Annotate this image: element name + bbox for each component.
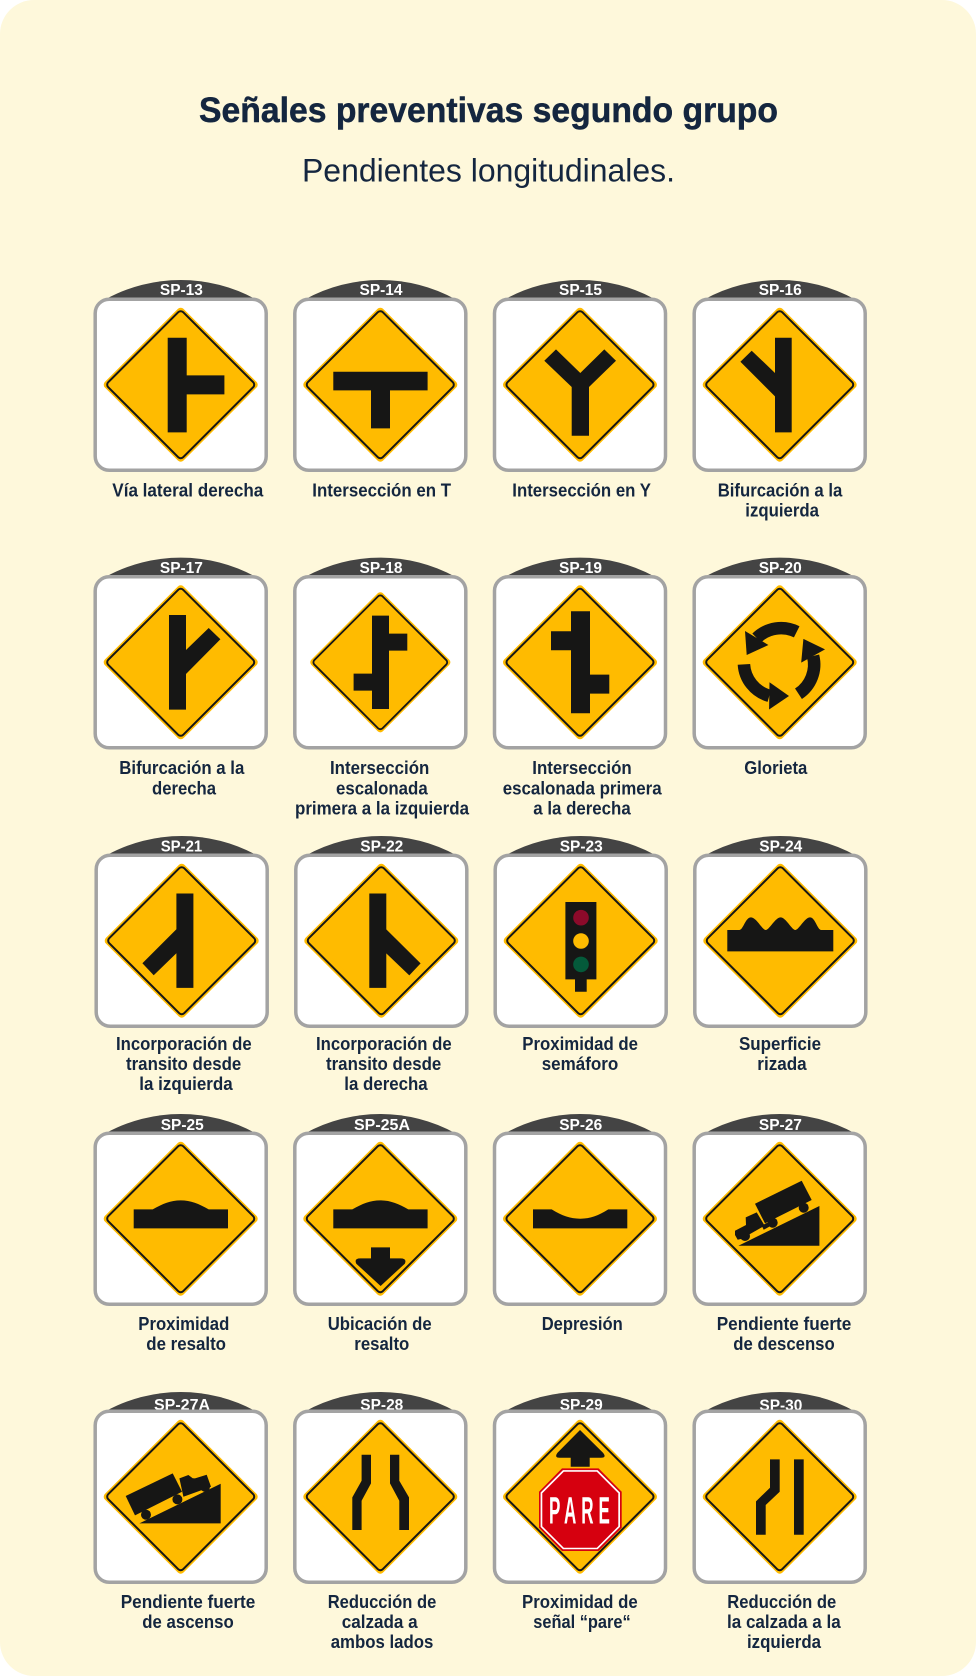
label SP-21 xyxy=(116,1034,252,1094)
icon: stop ahead: PARE xyxy=(549,1490,615,1532)
label SP-28: ambos lados xyxy=(331,1632,433,1652)
card frame SP-28 xyxy=(295,1411,466,1582)
code tab SP-14 xyxy=(305,280,455,299)
label SP-20: Glorieta xyxy=(744,758,808,778)
icon: merge from right xyxy=(308,868,454,1014)
label SP-29 xyxy=(522,1592,638,1632)
code tab SP-17 xyxy=(106,558,256,577)
label SP-24 xyxy=(739,1034,821,1074)
icon: road dip xyxy=(507,1146,653,1292)
card frame SP-13 xyxy=(95,299,266,470)
icon: staggered intersection right first xyxy=(507,589,653,735)
icon: road narrows left xyxy=(707,1424,853,1570)
sign card SP-25 xyxy=(95,1114,266,1354)
sign card SP-20 xyxy=(694,558,865,778)
code tab SP-15 xyxy=(505,280,655,299)
code tab SP-27: SP-27 xyxy=(759,1117,802,1134)
icon: road narrows both sides xyxy=(307,1424,453,1570)
sign card SP-26 xyxy=(494,1114,666,1334)
icon: fork right xyxy=(108,589,254,735)
code tab SP-23 xyxy=(506,836,656,856)
label SP-22: transito desde xyxy=(326,1054,441,1074)
card frame SP-20 xyxy=(694,577,865,748)
code tab SP-30 xyxy=(705,1392,855,1415)
label SP-18: primera a la izquierda xyxy=(295,798,470,818)
label SP-19 xyxy=(503,758,663,818)
sign card SP-18 xyxy=(295,558,470,818)
sign card SP-29 xyxy=(494,1392,666,1632)
icon: side road right xyxy=(108,312,254,458)
label SP-26: Depresión xyxy=(542,1314,623,1334)
code tab SP-26 xyxy=(505,1114,655,1134)
code tab SP-25A xyxy=(305,1114,455,1134)
code tab SP-25A: SP-25A xyxy=(354,1117,410,1134)
label SP-22 xyxy=(316,1034,452,1094)
label SP-24: rizada xyxy=(757,1054,808,1074)
label SP-17: derecha xyxy=(152,778,217,798)
label SP-27A xyxy=(121,1592,255,1632)
code tab SP-27 xyxy=(705,1114,855,1134)
label SP-14: Intersección en T xyxy=(312,481,451,501)
label SP-19: a la derecha xyxy=(533,798,632,818)
sign card SP-22 xyxy=(296,836,467,1094)
icon: rippled surface xyxy=(707,868,853,1014)
card frame SP-26 xyxy=(494,1133,666,1304)
sign card SP-21 xyxy=(96,836,267,1094)
card frame SP-17 xyxy=(95,577,266,748)
label SP-29: señal “pare“ xyxy=(533,1612,631,1632)
icon: T intersection xyxy=(307,312,453,458)
card frame SP-18 xyxy=(295,577,466,748)
icon: speed hump xyxy=(108,1146,254,1292)
icon: truck ascending slope xyxy=(108,1424,254,1570)
card frame SP-27 xyxy=(694,1133,865,1304)
code tab SP-24: SP-24 xyxy=(759,839,803,856)
label SP-16 xyxy=(718,481,843,521)
icon: fork left xyxy=(707,312,853,458)
sign card SP-27A xyxy=(95,1392,266,1632)
label SP-30 xyxy=(727,1592,842,1652)
label SP-15: Intersección en Y xyxy=(512,481,651,501)
code tab SP-17: SP-17 xyxy=(160,560,203,577)
code tab SP-29: SP-29 xyxy=(560,1397,603,1414)
label SP-22: la derecha xyxy=(344,1074,429,1094)
label SP-21: la izquierda xyxy=(139,1074,234,1094)
card frame SP-27A xyxy=(95,1411,266,1582)
card frame SP-14 xyxy=(295,299,466,470)
label SP-23: Proximidad de xyxy=(522,1034,638,1054)
card frame SP-19 xyxy=(494,577,666,748)
code tab SP-18 xyxy=(305,558,455,577)
label SP-18: Intersección xyxy=(330,758,429,778)
label SP-27: de descenso xyxy=(733,1334,835,1354)
label SP-19: Intersección xyxy=(532,758,632,778)
label SP-25A: Ubicación de xyxy=(328,1314,432,1334)
card frame SP-25A xyxy=(295,1133,466,1304)
label SP-18 xyxy=(295,758,470,818)
label SP-28 xyxy=(328,1592,436,1652)
icon: stop ahead xyxy=(507,1424,653,1570)
sign card SP-14 xyxy=(295,280,466,501)
icon: staggered intersection left first xyxy=(314,596,447,729)
card frame SP-23 xyxy=(495,855,666,1026)
sign card SP-25A xyxy=(295,1114,466,1354)
code tab SP-20: SP-20 xyxy=(759,560,802,577)
code tab SP-14: SP-14 xyxy=(359,282,403,299)
sign card SP-30 xyxy=(694,1392,865,1652)
label SP-17: Bifurcación a la xyxy=(119,758,245,778)
code tab SP-29 xyxy=(505,1392,655,1414)
sign card SP-28 xyxy=(295,1392,466,1652)
label SP-25 xyxy=(138,1314,229,1354)
sign card SP-27 xyxy=(694,1114,865,1354)
label SP-25A xyxy=(328,1314,432,1354)
code tab SP-16: SP-16 xyxy=(759,282,802,299)
code tab SP-28 xyxy=(305,1392,455,1414)
code tab SP-23: SP-23 xyxy=(560,839,603,856)
sign card SP-23 xyxy=(495,836,666,1074)
label SP-28: Reducción de xyxy=(328,1592,436,1612)
sign card SP-17 xyxy=(95,558,266,798)
code tab SP-16 xyxy=(705,280,855,299)
code tab SP-24 xyxy=(705,836,855,856)
code tab SP-13: SP-13 xyxy=(160,282,203,299)
card frame SP-29 xyxy=(494,1411,666,1582)
label SP-25: Proximidad xyxy=(138,1314,229,1334)
sign card SP-15 xyxy=(494,280,666,501)
label SP-30: izquierda xyxy=(747,1632,822,1652)
code tab SP-25: SP-25 xyxy=(161,1117,204,1134)
code tab SP-27A: SP-27A xyxy=(154,1397,210,1414)
sign card SP-13 xyxy=(95,280,266,501)
label SP-23: semáforo xyxy=(542,1054,618,1074)
label SP-27A: de ascenso xyxy=(142,1612,234,1632)
code tab SP-28: SP-28 xyxy=(360,1397,404,1414)
label SP-30: Reducción de xyxy=(727,1592,836,1612)
label SP-27 xyxy=(717,1314,851,1354)
sign card SP-16 xyxy=(694,280,865,521)
label SP-16: Bifurcación a la xyxy=(718,481,843,501)
title: Señales preventivas segundo grupo xyxy=(199,91,778,130)
code tab SP-25 xyxy=(106,1114,256,1134)
code tab SP-15: SP-15 xyxy=(559,282,602,299)
card frame SP-21 xyxy=(96,855,267,1026)
card frame SP-30 xyxy=(694,1411,865,1582)
label SP-23 xyxy=(522,1034,638,1074)
sign card SP-24 xyxy=(695,836,866,1074)
icon: merge from left xyxy=(109,868,255,1014)
label SP-30: la calzada a la xyxy=(727,1612,842,1632)
card frame SP-16 xyxy=(694,299,865,470)
code tab SP-26: SP-26 xyxy=(559,1117,603,1134)
code tab SP-22 xyxy=(306,836,456,856)
code tab SP-18: SP-18 xyxy=(359,560,403,577)
label SP-22: Incorporación de xyxy=(316,1034,452,1054)
code tab SP-30: SP-30 xyxy=(759,1398,802,1415)
icon: speed hump with down arrow xyxy=(307,1146,453,1292)
icon: traffic light xyxy=(508,868,654,1014)
label SP-29: Proximidad de xyxy=(522,1592,638,1612)
label SP-21: transito desde xyxy=(126,1054,241,1074)
code tab SP-21: SP-21 xyxy=(161,839,203,856)
code tab SP-20 xyxy=(705,558,855,577)
code tab SP-27A xyxy=(106,1392,256,1414)
code tab SP-19 xyxy=(505,558,655,577)
sign card SP-19 xyxy=(494,558,666,818)
subtitle: Pendientes longitudinales. xyxy=(302,153,675,189)
label SP-21: Incorporación de xyxy=(116,1034,252,1054)
code tab SP-13 xyxy=(106,280,256,299)
icon: truck descending slope xyxy=(707,1146,853,1292)
label SP-17 xyxy=(119,758,245,798)
label SP-19: escalonada primera xyxy=(503,778,663,798)
icon: roundabout arrows xyxy=(707,589,853,735)
label SP-25: de resalto xyxy=(146,1334,226,1354)
code tab SP-21 xyxy=(107,836,257,856)
label SP-28: calzada a xyxy=(342,1612,419,1632)
card frame SP-22 xyxy=(296,855,467,1026)
code tab SP-19: SP-19 xyxy=(559,560,602,577)
icon: Y intersection xyxy=(507,312,653,458)
label SP-27A: Pendiente fuerte xyxy=(121,1592,255,1612)
code tab SP-22: SP-22 xyxy=(360,839,403,856)
card frame SP-25 xyxy=(95,1133,266,1304)
card frame SP-15 xyxy=(494,299,666,470)
card frame SP-24 xyxy=(695,855,866,1026)
label SP-24: Superficie xyxy=(739,1034,821,1054)
label SP-18: escalonada xyxy=(336,778,429,798)
label SP-16: izquierda xyxy=(745,501,820,521)
label SP-13: Vía lateral derecha xyxy=(112,481,264,501)
label SP-27: Pendiente fuerte xyxy=(717,1314,851,1334)
label SP-25A: resalto xyxy=(354,1334,409,1354)
